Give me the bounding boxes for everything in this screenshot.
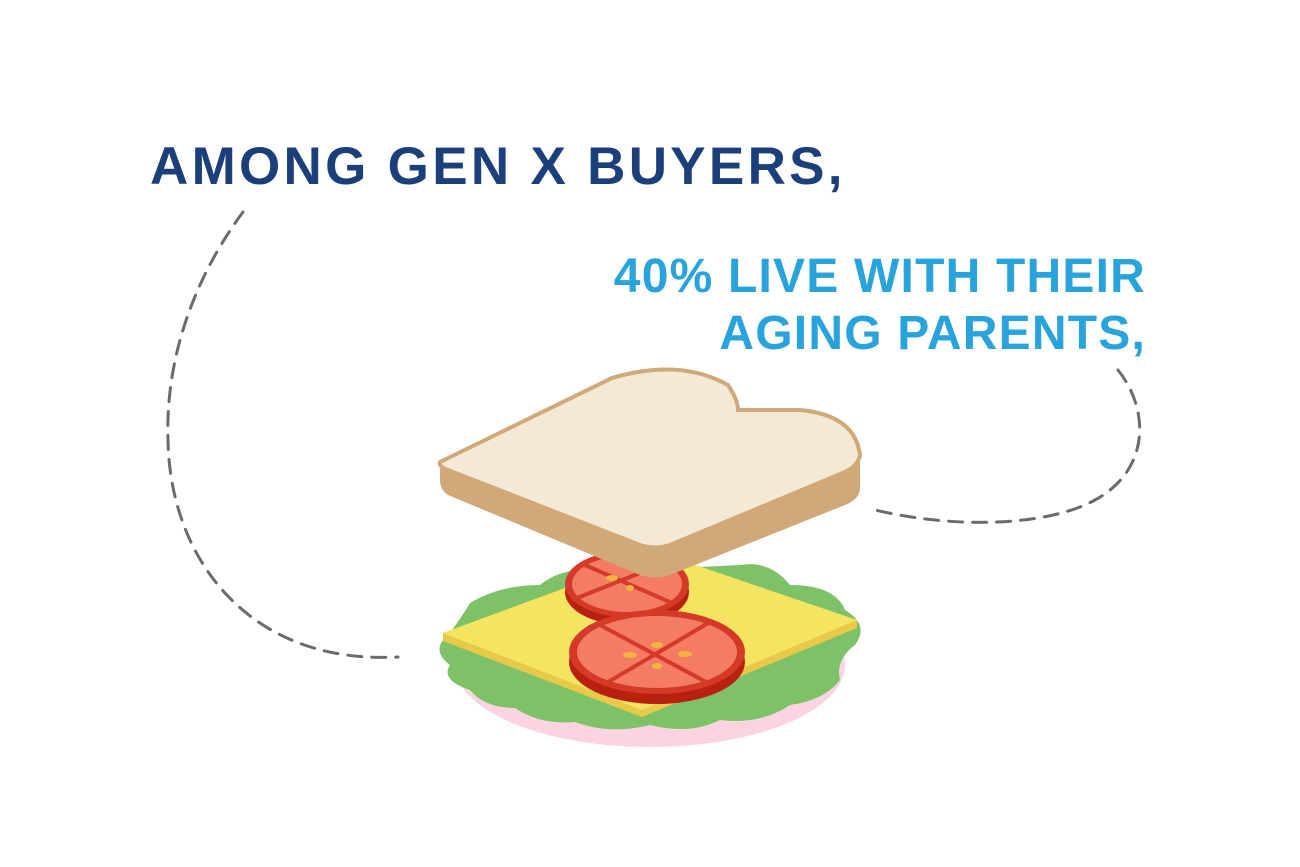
statistic text: 40% LIVE WITH THEIR <box>614 250 1146 303</box>
dashed line left <box>168 212 398 657</box>
statistic text: AGING PARENTS, <box>719 307 1146 360</box>
lettuce <box>439 564 861 729</box>
plate <box>455 583 845 747</box>
cheese <box>443 553 857 717</box>
dashed line right <box>875 370 1140 522</box>
tomato large <box>569 610 745 704</box>
bread slice <box>440 369 860 578</box>
tomato small <box>565 551 689 625</box>
statistic text <box>614 250 1146 360</box>
title: AMONG GEN X BUYERS, <box>150 137 846 196</box>
